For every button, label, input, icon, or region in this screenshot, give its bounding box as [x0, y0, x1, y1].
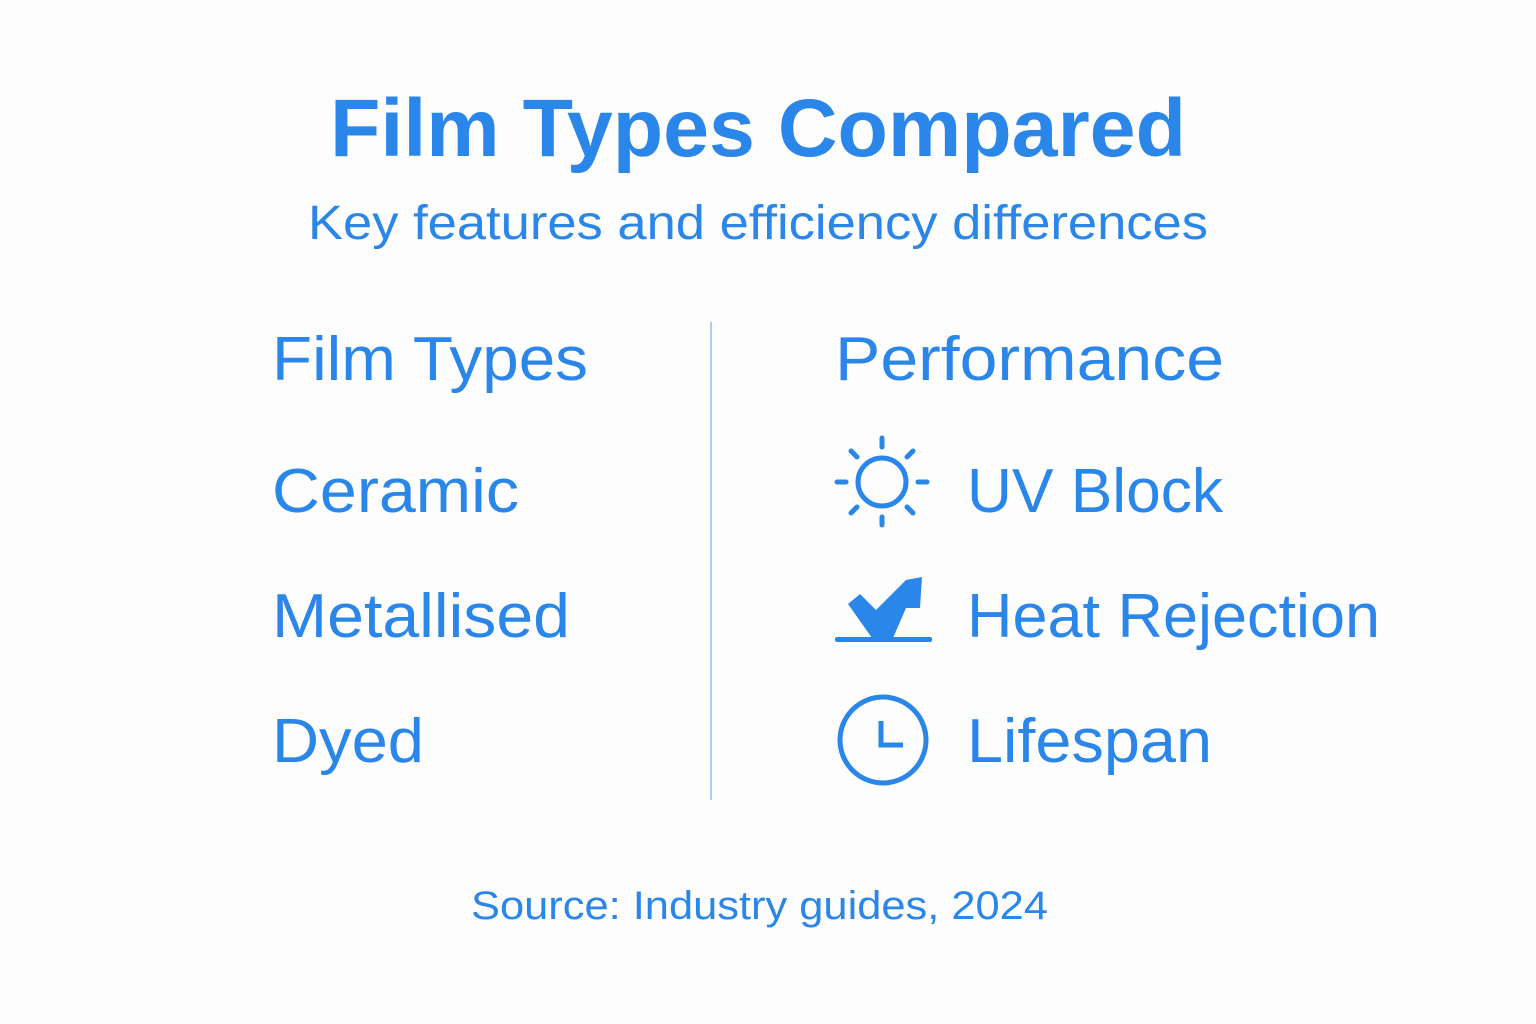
heading: performance: Performance — [835, 325, 1224, 394]
item: ceramic: Ceramic — [272, 457, 519, 526]
text: uv block: UV Block — [967, 457, 1224, 526]
text: lifespan: Lifespan — [967, 707, 1212, 776]
text: heat rejection: Heat Rejection — [967, 582, 1380, 651]
heading: film types: Film Types — [272, 325, 588, 394]
title: Film Types Compared — [330, 83, 1186, 174]
panel: film types — [272, 325, 588, 776]
item: metallised: Metallised — [272, 582, 570, 651]
panel: performance — [835, 325, 1380, 783]
subtitle: Key features and efficiency differences — [308, 197, 1208, 250]
source: Source: Industry guides, 2024 — [471, 884, 1048, 928]
icon: sun — [837, 438, 927, 525]
icon: heat check — [835, 577, 932, 642]
icon: clock — [840, 697, 926, 783]
item: dyed: Dyed — [272, 707, 424, 776]
